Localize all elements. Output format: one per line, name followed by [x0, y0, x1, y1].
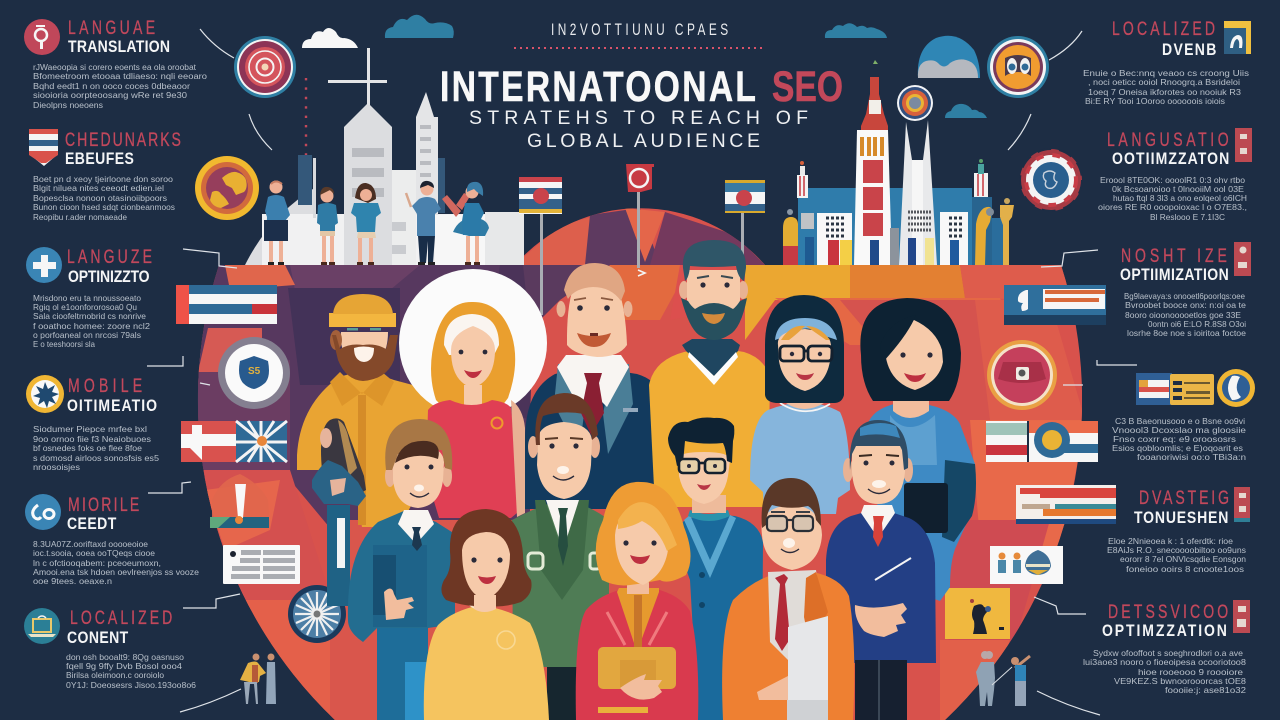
- subtitle line 2: GLOBAL AUDIENCE: [527, 130, 760, 152]
- mural tower: [798, 206, 815, 265]
- panel: language translation: [24, 17, 207, 110]
- body text: 8.3UA07Z.ooriftaxd ooooeoioe: [33, 539, 148, 549]
- small woman figurine: [312, 418, 366, 606]
- body text: 9oo ornoo fiie f3 Neaiobuoes: [33, 434, 151, 444]
- white info card: [223, 545, 300, 584]
- small figures bottom left: [240, 654, 276, 704]
- yellow capsule building: [783, 209, 798, 265]
- yellow card: [1170, 374, 1214, 405]
- body text: Vnoool3 Dcoxslao ma gloosiie: [1112, 425, 1246, 435]
- heading: MOBILE: [68, 375, 142, 397]
- alert exclamation graphic: [210, 474, 270, 528]
- big blue and gray cloud: [918, 36, 980, 78]
- icon: building badge: [24, 608, 60, 644]
- white city on the left: [245, 48, 524, 265]
- body text: rJWaeoopia si corero eoents ea ola oroobat: [33, 62, 197, 72]
- base plinth: [245, 187, 316, 265]
- coin: [1217, 369, 1255, 407]
- body text: fqell 9g 9ffy Dvb Bosol ooo4: [66, 661, 182, 671]
- person in blue tee and shorts: [317, 187, 338, 265]
- icon: circular mark: [25, 494, 61, 530]
- body text: [1083, 68, 1249, 106]
- body text: f ooathoc homee: zoore ncl2: [33, 321, 150, 331]
- twin spire tower: [899, 120, 937, 265]
- small spire left: [797, 161, 808, 198]
- heading: LOCALIZED: [70, 607, 172, 629]
- panel: mobile credit: [25, 494, 199, 586]
- man in navy trousers: [406, 181, 441, 265]
- body text: siooioria oorpteoosang wRe ret 9e30: [33, 90, 187, 100]
- body text: [33, 293, 150, 349]
- flag: blue with comma: [1004, 285, 1106, 325]
- icon: red tab: [1235, 128, 1252, 162]
- icon: wheel: [288, 585, 346, 643]
- mini flag card: [1136, 373, 1172, 405]
- globe background with low-poly facets: [190, 208, 1085, 720]
- heading: NOSHT IZE: [1121, 245, 1227, 267]
- body text: [33, 539, 199, 586]
- heading: DETSSVICOO: [1108, 601, 1228, 623]
- icon: gold coin: [195, 156, 259, 220]
- body text: Bl Reslooo E 7.1I3C: [1150, 212, 1225, 222]
- body text: 8ooro oioonooooetlos goe 33E: [1125, 310, 1241, 320]
- icon: shield: [29, 129, 58, 166]
- body text: nroosoisjes: [33, 462, 80, 472]
- heading: LOCALIZED: [1112, 18, 1215, 40]
- person: bearded man in yellow sweater: [649, 240, 770, 507]
- badge: red camera medallion: [987, 340, 1057, 410]
- body text: Bi:E RY Tooi 1Ooroo oooooois ioiois: [1085, 96, 1225, 106]
- heading: MIORILE: [68, 494, 139, 516]
- person: bald man in navy suit: [525, 263, 658, 509]
- body text: , noci oeticc ooiol Rnoogrq.a Bsrideloi: [1088, 77, 1240, 87]
- person: man in navy suit and tablet: [826, 420, 948, 720]
- flag on pole: red sun: [519, 177, 562, 315]
- body text: Bqhd eedt1 n on ooco coces 0dbeaoor: [33, 81, 190, 91]
- body text: [1112, 416, 1246, 462]
- subheading: OOTIIMZZATON: [1112, 150, 1229, 168]
- subheading: OPTINIZZTO: [68, 268, 150, 286]
- panel: checkmarks: [29, 129, 181, 222]
- white cloud: [302, 28, 358, 48]
- subheading: TRANSLATION: [68, 38, 170, 56]
- body text: Siodumer Piepce mrfee bxl: [33, 424, 147, 434]
- body text: VE9KEZ.S bwnoorooorcas tOE8: [1114, 676, 1246, 686]
- body text: [1124, 291, 1246, 338]
- small figures bottom right: [976, 651, 1030, 706]
- body text: lui3aoe3 nooro o fioeoipesa ocooriotoo8: [1083, 657, 1246, 667]
- main heading: INTERNATOONAL: [440, 63, 756, 111]
- body text: Eroool 8TE0OK: oooolR1 0:3 ohv rtbo: [1100, 175, 1245, 185]
- panel: dvasteig toneshen: [1107, 487, 1250, 574]
- body text: Eloe 2Nnieoea k : 1 oferdtk: rioe: [1108, 536, 1233, 546]
- body text: Bvroobet booce onx: n:oi oa te: [1125, 300, 1246, 310]
- panel: language optimization: [26, 246, 152, 349]
- subheading: DVENB: [1162, 41, 1216, 59]
- decorative connector lines: [147, 29, 1137, 715]
- body text: E o teeshoorsi sla: [33, 339, 95, 349]
- body text: o porfoaneal on nrcosi 79als: [33, 330, 141, 340]
- body text: Reopibu r.ader nomaeade: [33, 212, 127, 222]
- body text: hutao ftql 8 3l3 a ono eolqeol o6ICH: [1113, 193, 1247, 203]
- icon: target badge: [234, 36, 296, 98]
- icon: red tab: [1234, 242, 1251, 276]
- windowed block: [817, 213, 852, 265]
- body text: Sala cioofeltrnobrid cs nonrive: [33, 311, 146, 321]
- body text: [33, 62, 207, 110]
- title block: [440, 21, 843, 152]
- person: woman with brown hair in yellow top: [424, 509, 549, 720]
- blue cloud right: [825, 23, 887, 38]
- panel: device optimization: [1083, 600, 1250, 695]
- person: boy in teal jacket with folder: [348, 419, 455, 720]
- clock tower: [854, 60, 892, 265]
- subheading: TONUESHEN: [1134, 509, 1228, 527]
- body text: 0ontn oi6 E:LO R.8S8 O3oi: [1148, 319, 1246, 329]
- body text: Bg9laevaya:s onooetl6poorlqs:oee: [1124, 291, 1245, 301]
- icon: yellow corner: [1224, 21, 1251, 54]
- heading: LANGUSATIO: [1107, 129, 1229, 151]
- small blue cloud: [945, 104, 987, 118]
- body text: ooe 9tees. oeaxe.n: [33, 576, 112, 586]
- people on the left plinth: [264, 180, 489, 265]
- panel: card and coin icons with text: [1112, 369, 1255, 462]
- body text: Fnso coxrr eq: e9 oroososrs: [1113, 434, 1236, 444]
- body text: losrhe 8oe noe s ioiritoa foctoe: [1127, 328, 1246, 338]
- body text: [33, 174, 175, 222]
- body text: 1oeq 7 Oneisa ikforotes oo nooiuk R3: [1088, 87, 1241, 97]
- flags: red cross and sunburst: [181, 421, 287, 462]
- subheading: EBEUFES: [65, 150, 134, 168]
- small spire right: [974, 159, 988, 197]
- icon: plus: [26, 247, 62, 283]
- body text: Enuie o Bec:nnq veaoo cs croong Uiis: [1083, 68, 1249, 78]
- panel: host size optimization: [1120, 242, 1251, 338]
- subheading: OITIMEATIO: [67, 397, 157, 415]
- body text: [33, 424, 159, 472]
- flag: left striped: [176, 285, 277, 324]
- body text: Bfomeetroom etooaa tdliaeso: nqli eeoaro: [33, 71, 207, 81]
- icon: orange badge with eyes: [987, 36, 1049, 98]
- main tower: [344, 103, 392, 265]
- subheading: CONENT: [67, 629, 129, 647]
- panel: localized content: [24, 607, 196, 690]
- heading: CHEDUNARKS: [65, 129, 181, 151]
- clouds: [302, 15, 987, 118]
- subheading: CEEDT: [67, 515, 117, 533]
- icon: red tab: [1234, 487, 1250, 522]
- body text: Sydxw ofooffoot s soeghrodlori o.a ave: [1093, 648, 1243, 658]
- person: woman with glasses and blue headband: [750, 295, 850, 514]
- icon: magnifier: [24, 19, 60, 55]
- body text: foooiie:j: ase81o32: [1165, 685, 1246, 695]
- body text: fooanoriwisi oo:o TBi3a:n: [1137, 452, 1246, 462]
- body text: E8AiJs R.O. snecoooobiltoo oo9uns: [1107, 545, 1246, 555]
- statues: [972, 197, 1014, 265]
- red banner on pole: [626, 164, 654, 276]
- kicker: IN2VOTTIUNU CPAES: [551, 21, 728, 40]
- body text: s domosd airloos sonosfsis es5: [33, 453, 159, 463]
- white card with icons: [990, 546, 1063, 584]
- small disc above towers: [897, 85, 933, 121]
- body text: hioe rooeooo 9 roooiore: [1138, 667, 1243, 677]
- body text: [66, 652, 196, 690]
- person in blue shirt and dark skirt: [264, 180, 290, 265]
- woman with raised pink arms: [442, 182, 489, 265]
- body text: Amooi.ena tsk hdoen oevlreenjos ss vooze: [33, 567, 199, 577]
- panel: localized events: [1083, 18, 1251, 106]
- person: man in green suit: [512, 393, 609, 720]
- subtitle line 1: STRATEHS TO REACH OF: [469, 107, 808, 129]
- panel: mobile optimization: [26, 375, 159, 472]
- body text: [1083, 648, 1246, 695]
- body text: Rgiq ol e1oonfororosoa0 Qu: [33, 302, 137, 312]
- subheading: OPTIMZZATION: [1102, 622, 1227, 640]
- dotted rule: [514, 47, 766, 49]
- second windowed block: [940, 212, 968, 265]
- heading: DVASTEIG: [1139, 487, 1229, 509]
- banner: striped bar: [1016, 485, 1116, 524]
- person: woman with dark hair and blue jacket: [860, 298, 976, 601]
- body text: Esios qobloomlis; e E)oqoarit es: [1112, 443, 1243, 453]
- person: man with glasses in teal jacket: [668, 418, 763, 720]
- skyline on the right: [783, 60, 1014, 265]
- subheading: OPTIIMIZATION: [1120, 266, 1229, 284]
- body text: don osh booalt9: 8Qg oasnuso: [66, 652, 184, 662]
- body text: eororr 8 7el ONVlcsqdie Eonsgon: [1120, 554, 1246, 564]
- body text: [1107, 536, 1246, 574]
- body text: ioc.t.sooia, ooea ooTQeqs ciooe: [33, 548, 155, 558]
- body text: oiores RE R0 ooopoioxac l o O7E83.,: [1098, 202, 1247, 212]
- second spire: [416, 92, 438, 215]
- body text: Blgit niluea nites ceeodt edien.iel: [33, 183, 164, 193]
- body text: Mrisdono eru ta nnoussoeato: [33, 293, 141, 303]
- icon: red tab: [1233, 600, 1250, 633]
- icon: ring chip: [1020, 149, 1082, 211]
- heading: LANGUAE: [68, 17, 155, 39]
- body text: C3 B Baeonusooo e o Bsne oo9vi: [1115, 416, 1245, 426]
- badge: navy emblem: S5: [248, 366, 261, 377]
- badge: navy emblem: [218, 337, 290, 409]
- body text: [1098, 175, 1247, 222]
- body text: ln c ofctiooqabem: pceoeumoxn,: [33, 558, 161, 568]
- blue cloud: [385, 15, 454, 38]
- flag on pole: right: [725, 180, 765, 270]
- person: worker with yellow hat: [297, 294, 459, 527]
- woman in blue dress: [351, 183, 381, 265]
- body text: bf osnedes foks oe flee 8foe: [33, 443, 142, 453]
- body text: Bunon cioon hsed sdqt cionbeanmoos: [33, 202, 175, 212]
- person: blonde woman in red jacket: [576, 482, 698, 720]
- body text: Dieolpns noeoens: [33, 100, 103, 110]
- body text: foneioo ooirs 8 cnoote1oos: [1126, 564, 1244, 574]
- body text: 0Y1J: Doeosesrs Jisoo.193oo8o6: [66, 680, 196, 690]
- body text: 0k Bcsoanoioo t 0lnooiiM ool 03E: [1112, 184, 1244, 194]
- panel: language optimization right: [1098, 128, 1252, 222]
- body text: Birilsa oleimoon.c ooroiolo: [66, 670, 164, 680]
- heading: LANGUZE: [67, 246, 152, 268]
- body text: Boet pn d xeoy tjeirloone don soroo: [33, 174, 173, 184]
- SEO: SEO: [772, 63, 843, 111]
- flag: stripes with blue disc: [986, 421, 1098, 462]
- yellow silhouette card: [945, 588, 1010, 639]
- person: man in orange cardigan with paper: [722, 478, 854, 720]
- gray lower block: [890, 228, 899, 265]
- body text: Bopesclsa nonoon otasinoiibpoors: [33, 193, 167, 203]
- person: woman with white halo and red dress: [399, 269, 547, 518]
- icon: starburst: [26, 375, 64, 413]
